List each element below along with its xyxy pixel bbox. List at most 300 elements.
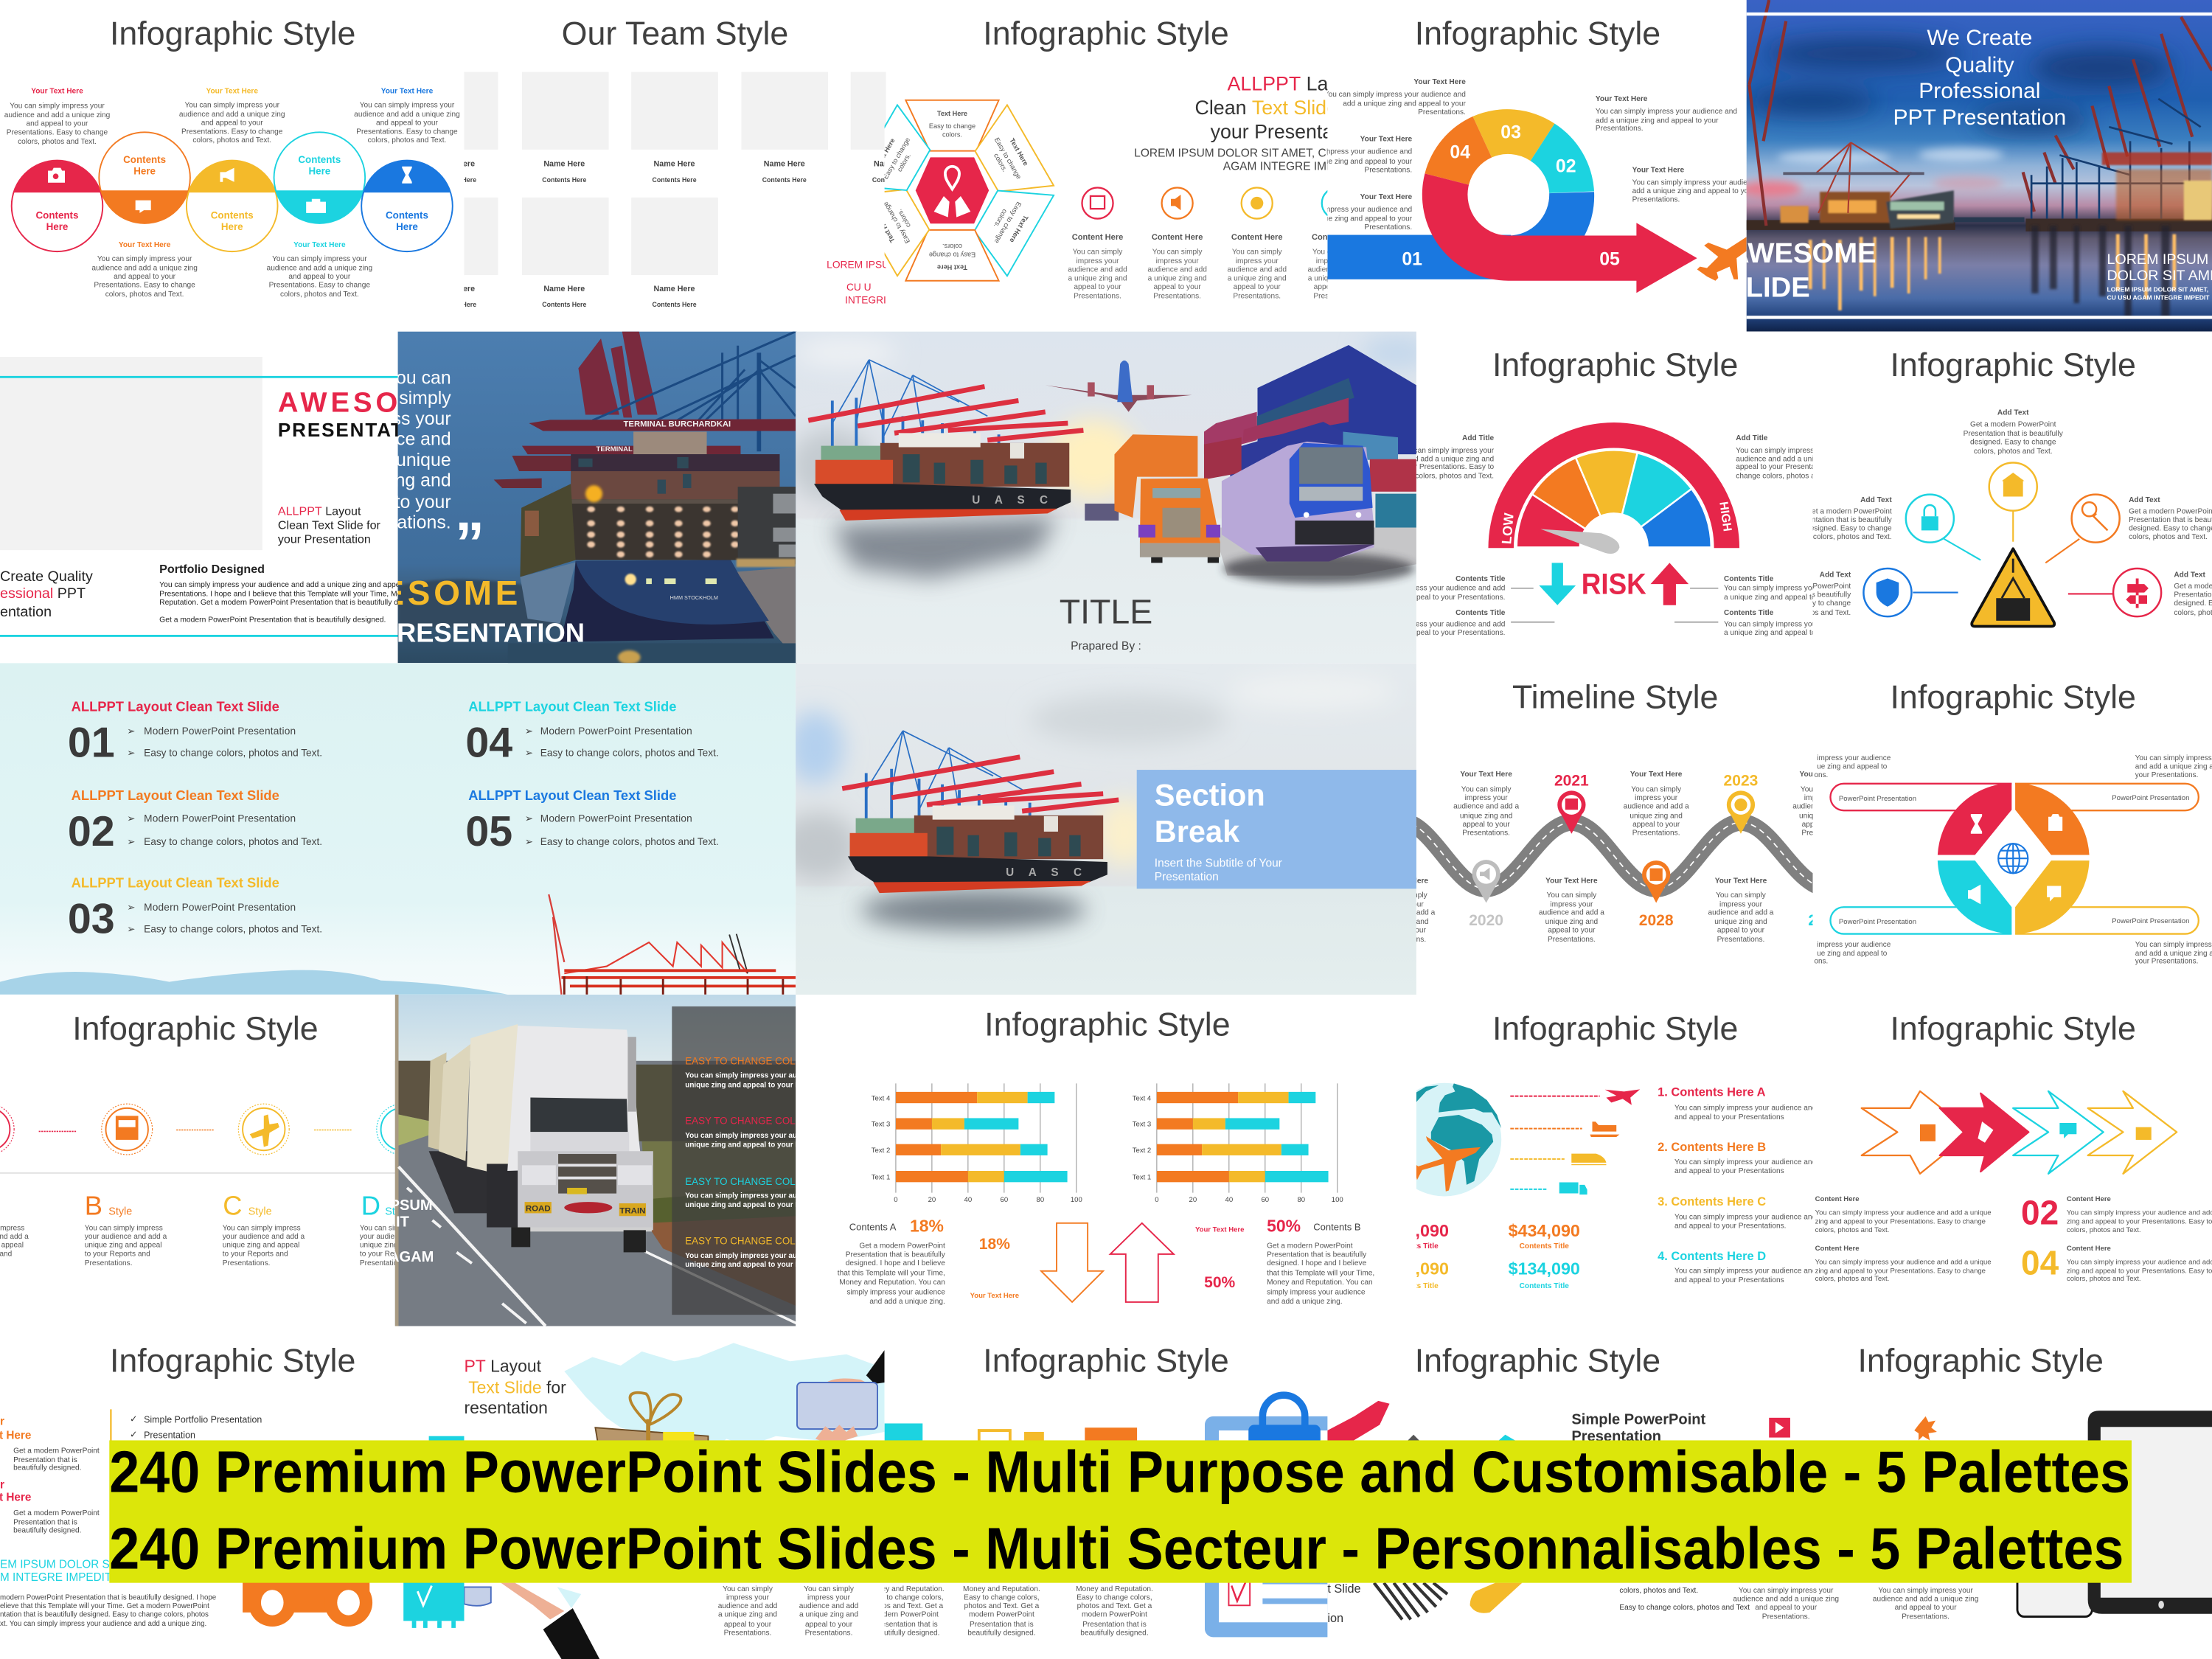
step text: your audience and add a (85, 1233, 167, 1241)
contents b: Money and Reputation. You can (1267, 1279, 1373, 1287)
years: 2021 (1554, 773, 1589, 790)
chart left: 20 (928, 1196, 936, 1204)
list headings: ALLPPT Layout Clean Text Slide (72, 698, 279, 714)
panel: hazard infographic (1751, 347, 2212, 635)
crane silhouette (549, 894, 796, 995)
divider (0, 1172, 397, 1174)
right text blocks: Your Text Here (1596, 95, 1648, 103)
list headings: ALLPPT Layout Clean Text Slide (72, 874, 279, 890)
bullets: Modern PowerPoint Presentation (540, 726, 692, 737)
icon: pointing hand (464, 1583, 599, 1659)
bullets: Easy to change colors, photos and Text. (540, 836, 719, 847)
step letters: D (361, 1190, 380, 1220)
timeline texts (1369, 771, 1859, 944)
chart left (872, 1083, 1082, 1204)
headline text: Professional (1919, 79, 2040, 103)
small icons (1408, 1435, 1522, 1444)
photo: water (832, 516, 1058, 578)
step text: Presentations. (223, 1259, 270, 1267)
timeline texts: You can simply (1631, 785, 1682, 793)
text columns: Money and Reputation. (963, 1585, 1040, 1593)
member names: Name Here (764, 160, 805, 169)
photo: ship: A (995, 494, 1003, 507)
step letters: B (85, 1190, 102, 1220)
step text: your audience and add a (223, 1233, 305, 1241)
timeline texts: unique zing and (1630, 813, 1683, 821)
slide text (1327, 1582, 1361, 1625)
timeline texts: You can simply (1461, 785, 1512, 793)
texts: colors, photos and Text. (1813, 533, 1892, 541)
chart left: Text 4 (872, 1094, 891, 1102)
section heading: Break (1155, 814, 1240, 849)
left quote: Create Quality (0, 568, 93, 585)
side text: ue zing and appeal to (1817, 763, 1888, 771)
photo: truck (428, 1024, 653, 1252)
connector arrows (39, 1130, 352, 1131)
lorem text: CU USU AGAM INTEGRE IMPEDIT (2107, 294, 2210, 302)
panel: circles infographic (4, 15, 460, 299)
icon: phone outline (2017, 1566, 2092, 1617)
timeline texts: impress your (1635, 794, 1678, 802)
clouds (779, 675, 1397, 880)
checklist: Simple Portfolio Presentation (144, 1415, 262, 1425)
sun glow (1048, 419, 1138, 498)
bullets: Modern PowerPoint Presentation (144, 813, 296, 824)
side text: impress your audience (1817, 754, 1891, 762)
section heading: Section (1155, 777, 1265, 812)
quote text: add a unique (345, 450, 451, 470)
left texts: a unique zing and appeal to your Presentations. (1347, 629, 1505, 637)
stat values: $434,090 (1509, 1221, 1580, 1240)
text blocks: colors, photos and Text. (1815, 1226, 1889, 1234)
image placeholder (0, 357, 262, 550)
timeline texts: You can simply (1547, 891, 1597, 900)
bullets: ➢ (127, 924, 136, 935)
section heading (1155, 777, 1265, 849)
text columns: Money and Reputation. (1076, 1585, 1153, 1593)
member names: Contents Here (432, 176, 476, 184)
content columns: Content Here (1072, 233, 1123, 242)
icon: puzzle (1914, 1416, 1937, 1440)
content columns: impress your (1156, 257, 1199, 265)
contents a: 18% (910, 1216, 944, 1235)
headline text (1893, 26, 2066, 130)
side text (1814, 754, 2212, 966)
slide text (464, 1357, 566, 1417)
text columns: beautifully designed. (872, 1629, 939, 1637)
text blocks: colors, photos and Text. (18, 138, 97, 146)
icon: red plane (1327, 1401, 1390, 1453)
texts: colors, photos and Text. (1772, 609, 1851, 617)
member names: Name Here (543, 285, 585, 293)
left texts: Contents Title (1455, 609, 1506, 617)
text blocks: and appeal to your (201, 119, 263, 127)
text notes: colors, photos and Text. (1619, 1587, 1698, 1595)
texts: Presentation that is beautifully (1751, 591, 1851, 599)
timeline texts: appeal to your (1717, 927, 1765, 935)
red lorem text: CU U (846, 282, 872, 293)
slide heading: Simple PowerPoint (1571, 1411, 1706, 1427)
subtitle: AGAM INTEGRE IMPEDIT (1223, 161, 1360, 173)
icon circles (1863, 463, 2161, 616)
left text blocks: Presentations. (1364, 166, 1412, 174)
left quote: essional PPT (0, 585, 86, 602)
step text: unique zing and appeal (85, 1241, 162, 1249)
bullets: ➢ (525, 748, 534, 759)
cyan lorem (0, 1559, 119, 1584)
left text blocks: Your Text Here (1413, 78, 1466, 86)
list text: You can simply impress your audience and (1674, 1105, 1816, 1113)
pill labels: PowerPoint Presentation (1839, 795, 1916, 803)
arrow down (1539, 563, 1576, 605)
content columns (1068, 233, 1367, 301)
content columns: Presentations. (1313, 293, 1361, 301)
text blocks: You can simply impress your audience and add a unique (1815, 1208, 1992, 1217)
timeline texts: Presentations. (1801, 830, 1849, 838)
quote text (334, 367, 451, 533)
timeline texts: impress your (1381, 900, 1424, 908)
quadrant icons (1968, 814, 2062, 904)
text blocks: You can simply impress your (10, 102, 105, 110)
bullets (127, 726, 719, 935)
side text: You can simply impress (2135, 754, 2212, 762)
chart numbers (1402, 122, 1620, 270)
bullets: Modern PowerPoint Presentation (540, 813, 692, 824)
heading: Timeline Style (1512, 678, 1718, 715)
overlay text: unique zing and appeal to your Presentations. (685, 1261, 846, 1269)
bottom body: modern PowerPoint Presentation that is beautifully designed. I hope (0, 1594, 216, 1602)
timeline texts: Your Text Here (1545, 877, 1598, 886)
cyan lorem: M INTEGRE IMPEDIT (0, 1571, 111, 1584)
hexagon diagram: colors. (992, 208, 1009, 229)
texts: designed. Easy to change (1806, 524, 1892, 532)
years (1469, 773, 1843, 929)
text blocks: and appeal to your (27, 119, 88, 128)
text blocks: colors, photos and Text. (105, 291, 184, 299)
content columns: a unique zing and (1148, 275, 1207, 283)
texts: Presentation that is beautifully (1964, 430, 2064, 438)
text blocks: Your Text Here (381, 87, 434, 95)
step letters: Style (108, 1206, 132, 1217)
text columns: modern PowerPoint (873, 1611, 939, 1619)
bullets: ➢ (127, 902, 136, 913)
text blocks: Presentations. Easy to change (7, 129, 108, 137)
side text: your Presentations. (2135, 771, 2198, 779)
text blocks: and appeal to your (114, 273, 176, 281)
text columns: Easy to change colors, (868, 1594, 944, 1602)
left texts: Contents Title (1455, 575, 1506, 583)
connectors (1913, 511, 2113, 594)
bullets: Modern PowerPoint Presentation (144, 902, 296, 913)
hexagon diagram: Text Here (937, 264, 967, 271)
hexagon diagram: Easy to change (882, 201, 911, 245)
texts: Presentation that is beautifully (1792, 516, 1893, 524)
circle labels: Here (396, 221, 418, 232)
left body: Get a modern PowerPoint (13, 1447, 100, 1455)
right text blocks: Presentations. (1632, 196, 1680, 204)
water reflection (860, 890, 1086, 930)
slide heading: your Presentation (1211, 120, 1365, 142)
icon: globe (1998, 844, 2028, 873)
list text: and appeal to your Presentations (1674, 1276, 1784, 1284)
contents a: Get a modern PowerPoint (859, 1242, 945, 1250)
heading: Infographic Style (1415, 15, 1660, 52)
member names: Contents Here (652, 301, 697, 308)
checklist: Presentation (144, 1430, 195, 1441)
callouts: Your Text Here (1195, 1225, 1244, 1234)
photo: ship (848, 805, 1107, 893)
overlay text: You can simply impress your audience (685, 1252, 821, 1260)
timeline texts: impress your (1719, 900, 1763, 908)
circle labels: Contents (298, 154, 341, 165)
heading: Infographic Style (1891, 347, 2136, 383)
panel: globe transport (1377, 1010, 1816, 1290)
left body: Get a modern PowerPoint (13, 1509, 100, 1517)
photo: ship: S (1017, 494, 1025, 507)
quote mark: ” (455, 511, 484, 577)
text blocks: Presentations. Easy to change (356, 128, 458, 136)
caption: Clean Text Slide for (278, 518, 381, 532)
right texts: Contents Title (1724, 575, 1774, 583)
text columns: impress your (726, 1594, 770, 1602)
timeline texts: You can simply (1716, 891, 1767, 900)
checklist (130, 1414, 262, 1441)
step text: to your Reports and (85, 1251, 150, 1259)
timeline texts: audience and add a (1539, 909, 1604, 917)
contents a (838, 1216, 946, 1306)
section subtitle (1155, 858, 1282, 883)
globe (1388, 1083, 1501, 1197)
photo caption: IT (396, 1214, 410, 1230)
hexagon diagram: Easy to change (929, 122, 975, 130)
stat values: Contents Title (1520, 1282, 1569, 1290)
chart right: 20 (1189, 1196, 1197, 1204)
portfolio text: Get a modern PowerPoint Presentation that is beautifully designed. (159, 616, 386, 625)
stat values: Contents Title (1520, 1242, 1569, 1251)
right texts: change colors, photos and Text. (1736, 473, 1841, 481)
text blocks (1815, 1195, 2212, 1283)
texts: Get a modern PowerPoint (1970, 421, 2056, 429)
slide heading: Presentation (1571, 1428, 1661, 1444)
bullets: ➢ (525, 836, 534, 847)
section subtitle: Insert the Subtitle of Your (1155, 858, 1282, 870)
chart left: 40 (964, 1196, 972, 1204)
heading: Infographic Style (1891, 678, 2136, 715)
timeline texts: Your Text Here (1799, 771, 1851, 779)
text columns: You can simply (804, 1585, 855, 1593)
panel: bottom left checklist slide (0, 1343, 465, 1628)
contents b: 50% (1267, 1216, 1301, 1235)
photo: sky and land (395, 995, 797, 1326)
left text blocks: You can simply impress your audience and (1270, 148, 1412, 156)
right text blocks: add a unique zing and appeal to your (1632, 187, 1756, 195)
contents a: simply impress your audience (847, 1288, 945, 1296)
overlay text: You can simply impress your audience (685, 1072, 821, 1080)
content columns: impress your (1316, 257, 1359, 265)
text blocks: Presentations. Easy to change (181, 128, 283, 136)
photo: cranes (808, 360, 1083, 454)
content columns: You can simply (1073, 248, 1123, 256)
chart left: 100 (1071, 1196, 1082, 1204)
chart left: 80 (1037, 1196, 1044, 1204)
ring quadrants (1938, 783, 2090, 934)
side text: ue zing and appeal to (1817, 950, 1888, 958)
right text blocks: Your Text Here (1632, 166, 1685, 174)
panel: bottom right text slide (1571, 1411, 1978, 1621)
bullets: ➢ (127, 813, 136, 824)
text blocks: Presentations. Easy to change (269, 281, 370, 289)
contents b: Contents B (1313, 1221, 1361, 1232)
content columns: appeal to your (1314, 283, 1361, 291)
right texts (1724, 434, 1882, 637)
step text: You can simply impress (85, 1224, 163, 1232)
circle labels (36, 154, 428, 232)
timeline texts: Presentations. (1632, 830, 1680, 838)
hexagon diagram: colors. (942, 131, 962, 139)
step text: unique zing and appeal (360, 1241, 437, 1249)
bullets: ➢ (525, 726, 534, 737)
left body: Presentation that is (13, 1456, 77, 1464)
right texts: You can simply impress your audience (1724, 620, 1851, 628)
panel: transport process (0, 1010, 442, 1267)
timeline texts: audience and add a (1708, 909, 1774, 917)
caption (278, 504, 381, 546)
risk label: RISK (1582, 567, 1646, 600)
text blocks: Content Here (1815, 1245, 1860, 1253)
pill labels (1839, 794, 2189, 926)
timeline texts: unique zing and (1545, 918, 1598, 926)
bottom body: xt. You can simply impress your audience and add a unique zing. (0, 1620, 206, 1628)
text blocks: audience and add a unique zing (4, 111, 110, 119)
texts: Add Text (1820, 571, 1851, 580)
hexagon diagram: Easy to change (882, 136, 911, 181)
content columns: Content Here (1312, 233, 1363, 242)
quote text: impress your (346, 408, 451, 429)
panel: clipboard icon (1205, 1391, 1327, 1637)
panel: ring with pills (1812, 678, 2212, 966)
texts: colors, photos and Text. (1974, 448, 2053, 456)
left texts: Add Title (1462, 434, 1495, 442)
overlay text: EASY TO CHANGE COLOR (685, 1176, 810, 1187)
photo: harbour at dusk (1739, 0, 2212, 332)
chart right: 80 (1297, 1196, 1305, 1204)
circle labels: Contents (386, 210, 428, 221)
timeline texts: Your Text Here (1460, 771, 1512, 779)
icon: orange vehicle (243, 1577, 372, 1627)
overlay text: You can simply impress your audience (685, 1132, 821, 1140)
photo caption (389, 1197, 434, 1265)
quote text: appeal to your (335, 492, 451, 512)
photo: ship: S (1051, 866, 1059, 879)
left text blocks: You can simply impress your audience and (1324, 91, 1466, 99)
text blocks: and appeal to your (376, 119, 439, 127)
list text (1674, 1105, 1816, 1284)
text blocks: and appeal to your (288, 273, 351, 281)
heading: Infographic Style (983, 15, 1229, 52)
list text: You can simply impress your audience and (1674, 1267, 1816, 1276)
headline text: Quality (1945, 53, 2014, 77)
contents a: Presentation that is beautifully (846, 1251, 946, 1259)
bullets: ➢ (127, 748, 136, 759)
slide heading: Clean Text Slide for (1195, 97, 1366, 119)
timeline texts: impress your (1465, 794, 1508, 802)
text blocks: Your Text Here (293, 241, 346, 249)
text columns: audience and add a unique zing (1873, 1596, 1978, 1604)
member names: Name Here (543, 160, 585, 169)
heading: Infographic Style (110, 1343, 355, 1380)
timeline texts: appeal to your (1548, 927, 1596, 935)
bullets: Easy to change colors, photos and Text. (144, 836, 322, 847)
text blocks: colors, photos and Text. (2067, 1275, 2141, 1283)
bullets: Easy to change colors, photos and Text. (144, 924, 322, 935)
banner (109, 1440, 2132, 1583)
chart left: Text 1 (872, 1173, 890, 1181)
pills (1830, 784, 2199, 934)
connector arrows (1511, 588, 1718, 622)
checklist: ✓ (130, 1430, 137, 1440)
portfolio text: Reputation. Get a modern PowerPoint Presentation that is beautifully designed. (159, 599, 427, 607)
list headings: ALLPPT Layout Clean Text Slide (468, 698, 676, 714)
stat values: $134,090 (1509, 1259, 1580, 1278)
photo: ship at terminal: TERMINAL (597, 445, 633, 453)
icon circles (1082, 187, 1353, 219)
side text: ons. (1814, 771, 1828, 779)
photo: truck: TRAIN (619, 1206, 645, 1215)
text blocks: audience and add a unique zing (91, 264, 198, 272)
text blocks: zing and appeal to your Presentations. Easy to change (1815, 1218, 1986, 1226)
content columns: a unique zing and (1068, 275, 1127, 283)
chart left: Text 2 (872, 1147, 890, 1155)
step letters (85, 1190, 408, 1220)
chart right: 100 (1332, 1196, 1343, 1204)
contents b (1267, 1216, 1374, 1306)
chart right: Text 2 (1133, 1147, 1151, 1155)
photo caption: AGAM (389, 1249, 434, 1265)
numbers (2021, 1194, 2059, 1282)
panel: our team (432, 15, 917, 308)
chain arrows (1862, 1091, 2177, 1174)
list numbers: 05 (465, 808, 512, 855)
contents a: designed. I hope and I believe (846, 1259, 945, 1267)
text blocks: Content Here (1815, 1195, 1860, 1203)
right text blocks: You can simply impress your audience and (1632, 179, 1774, 187)
list: 3. Contents Here C (1658, 1195, 1766, 1208)
circle labels: Here (133, 165, 156, 176)
content columns: Presentations. (1153, 293, 1201, 301)
text columns: modern PowerPoint (969, 1611, 1034, 1619)
list text: You can simply impress your audience and (1674, 1213, 1816, 1221)
overlay text: EASY TO CHANGE COLOR (685, 1235, 810, 1246)
icon: gift (595, 1393, 708, 1453)
transport icons (1559, 1089, 1640, 1194)
chart right (1133, 1083, 1343, 1204)
texts: Add Text (1860, 496, 1892, 504)
stat values: Contents Title (1388, 1242, 1439, 1251)
bullets: ➢ (127, 836, 136, 847)
icon: barcode (1374, 1583, 1447, 1619)
text blocks: You can simply impress your (97, 255, 192, 263)
content columns: impress your (1077, 257, 1119, 265)
hexagon diagram: colors. (896, 152, 912, 173)
panel: road truck photo (389, 994, 846, 1326)
caption: your Presentation (278, 533, 371, 546)
left quote: entation (0, 604, 52, 620)
text blocks: colors, photos and Text. (1815, 1275, 1889, 1283)
text columns: Presentations. (1762, 1613, 1810, 1621)
title: TITLE (1060, 593, 1152, 631)
content columns: You can simply (1232, 248, 1283, 256)
member names: Contents Here (432, 301, 476, 308)
